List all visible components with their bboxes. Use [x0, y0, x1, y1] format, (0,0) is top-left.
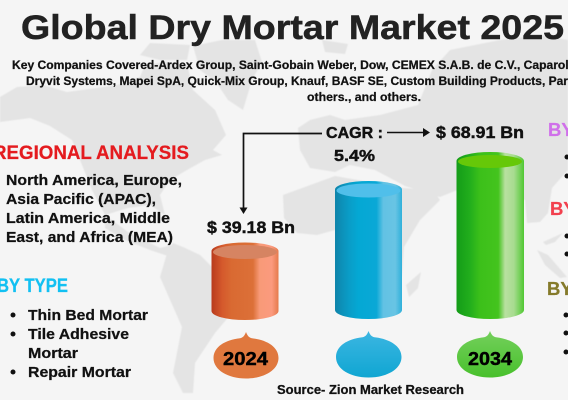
- cylinder: 2025: [335, 181, 402, 319]
- key companies text: Key Companies Covered-Ardex Group, Saint-Gobain Weber, Dow, CEMEX S.A.B. de C.V., Caparol,: [12, 58, 568, 72]
- CAGR label: CAGR :: [326, 125, 383, 142]
- bullets: [564, 312, 568, 354]
- type list: [10, 307, 148, 381]
- regions list: Latin America, Middle: [6, 210, 170, 227]
- cylinder: 2034: [456, 152, 524, 319]
- panel: right segment three: [547, 278, 568, 354]
- key companies text: Dryvit Systems, Mapei SpA, Quick-Mix Group, Knauf, BASF SE, Custom Building Products, Par: [26, 74, 568, 88]
- bullets: [564, 234, 568, 256]
- regions list: Asia Pacific (APAC),: [6, 191, 156, 208]
- CAGR arrow to 2024 value: [240, 134, 322, 214]
- regions list: [6, 172, 182, 246]
- badge: 2034: 2034: [468, 349, 512, 369]
- key companies text: [12, 58, 568, 104]
- badge: 2024: 2024: [223, 349, 268, 369]
- regions list: East, and Africa (MEA): [6, 229, 173, 246]
- type list: Mortar: [28, 345, 78, 362]
- type list: Repair Mortar: [28, 364, 131, 381]
- cylinder: 2024: [212, 242, 278, 320]
- badge: 2025: [336, 331, 402, 378]
- panel: right segment one: [548, 119, 568, 178]
- 2024 value: $ 39.18 Bn: [207, 218, 295, 237]
- CAGR arrow to 2034 value: [387, 128, 430, 137]
- CAGR value: 5.4%: [334, 148, 375, 165]
- type list: Thin Bed Mortar: [28, 307, 148, 324]
- 2034 value: $ 68.91 Bn: [436, 123, 524, 142]
- panel: right segment two: [550, 198, 568, 256]
- panel: by type: [0, 276, 148, 381]
- badge: 2034: [457, 331, 523, 378]
- title: Global Dry Mortar Market 2025: [21, 9, 564, 47]
- type list: Tile Adhesive: [28, 326, 129, 343]
- bullets: [564, 154, 568, 178]
- badge: 2024: [214, 332, 278, 378]
- source note: Source- Zion Market Research: [277, 383, 464, 397]
- panel: regional analysis: [0, 143, 189, 246]
- regions list: North America, Europe,: [6, 172, 182, 189]
- key companies text: others., and others.: [307, 90, 421, 104]
